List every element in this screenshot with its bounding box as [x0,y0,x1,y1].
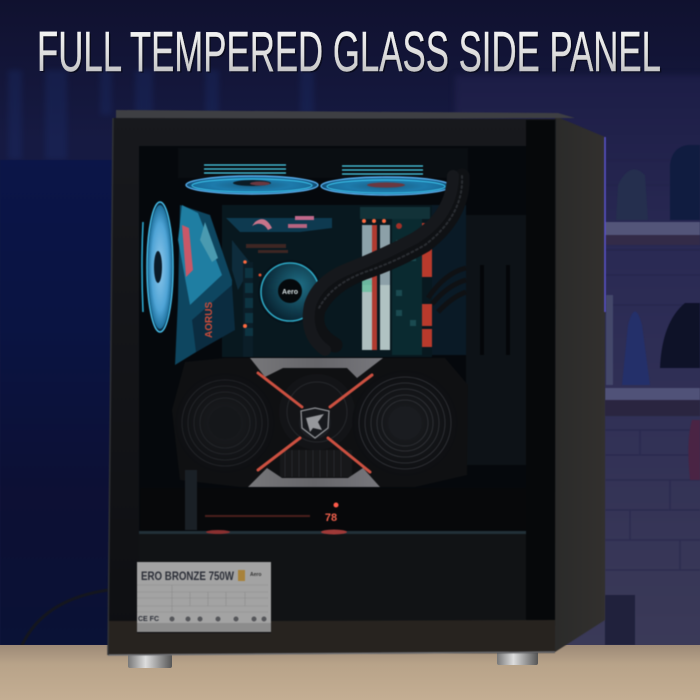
PC case [108,110,605,655]
RAM sticks [362,219,390,350]
gpu backplate digital readout: 78 [325,512,337,524]
PSU label: CE FC [138,616,159,623]
fan: top right [321,177,451,195]
brand text: AORUS [204,302,215,338]
PSU label: Aero [250,572,261,578]
case: table reflection at bottom of glass [108,620,555,655]
gpu: left fan [175,373,275,473]
case: glass front panel [108,118,556,655]
VRM red light strip [422,223,432,347]
gpu: centre fan [279,374,355,477]
motherboard [222,205,466,357]
PSU shroud [139,530,526,621]
gpu: silver bottom bar [248,468,380,487]
PSU label [137,562,271,632]
AIO pump [258,260,322,324]
gpu: red X light bars [258,373,372,472]
case: top edge [116,110,575,120]
background: shelves with figures [605,145,700,645]
case: blue edge light [604,137,606,312]
case: left glass edge [108,118,113,655]
top radiator fans [178,148,468,195]
aorus motherboard shroud [175,205,235,365]
graphics card [172,358,468,487]
PSU label: ERO BRONZE 750W [141,571,234,583]
braided liquid cooling tubes [309,176,462,350]
case feet [128,651,538,668]
power cables [428,268,466,312]
case: rear grille area [466,215,526,465]
case: bottom edge [108,652,555,655]
case: interior [139,146,526,531]
table top [0,645,700,700]
gpu: silver top bar [250,358,383,378]
fan: top left [186,176,318,194]
AIO pump: Aero [282,289,298,296]
gpu: right fan [352,370,458,476]
monitor on the left [0,160,114,650]
case: right side panel [555,116,605,652]
case: dark right band of glass [526,120,555,652]
rear side fan [142,202,173,332]
gpu: aorus shield logo [299,407,331,439]
gpu backplate digital readout [140,470,526,530]
